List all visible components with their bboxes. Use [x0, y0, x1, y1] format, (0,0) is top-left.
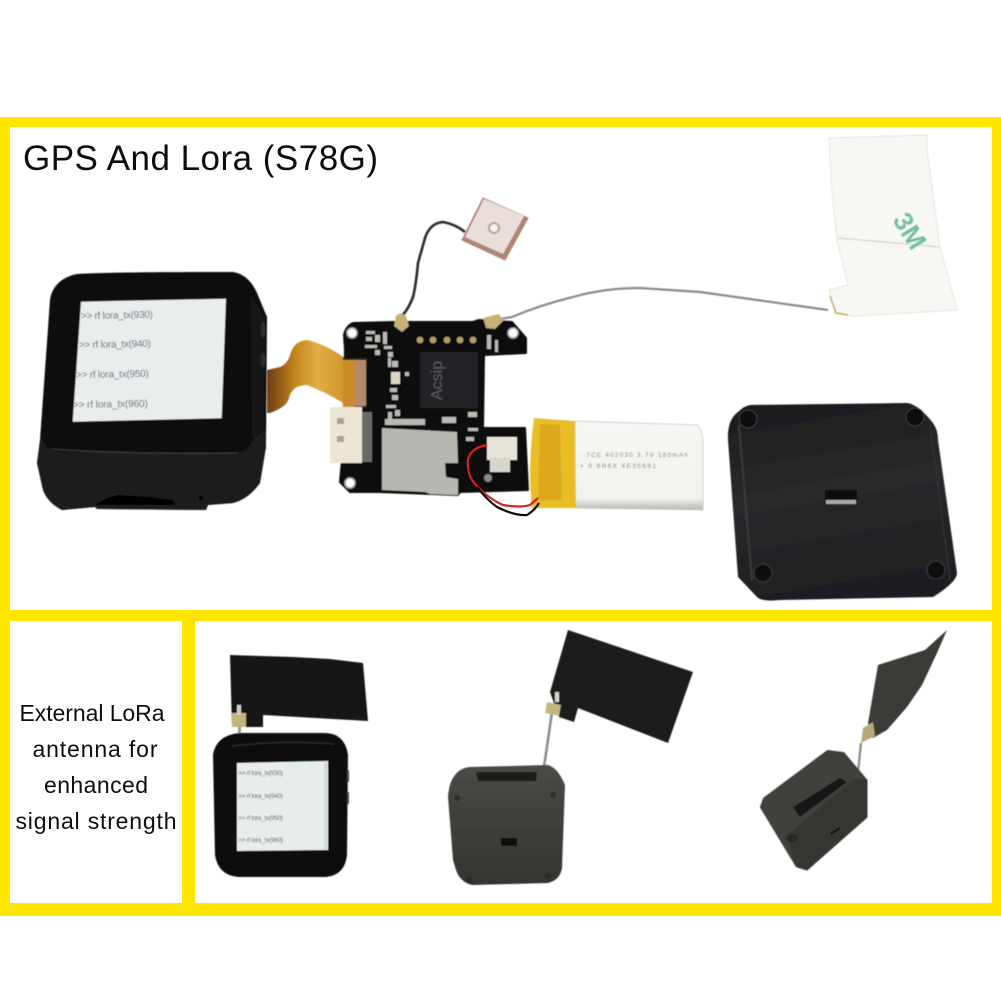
- main chip: [420, 352, 478, 408]
- gold header pins: [417, 337, 476, 343]
- flex antenna: [550, 630, 693, 743]
- PCB main board: [330, 314, 528, 495]
- LiPo battery: + 0 6R6X 4E35691: [580, 463, 656, 470]
- device front with external antenna: [213, 655, 368, 877]
- main chip: Acsip: [429, 361, 446, 400]
- board outline: [340, 320, 528, 495]
- device body: [37, 272, 267, 510]
- device screen: >> rf lora_tx(960): [238, 837, 283, 844]
- back cover plate: [728, 403, 957, 601]
- 3M logo: 3M: [887, 207, 932, 255]
- screw holes: [739, 408, 945, 582]
- back slot: [501, 838, 517, 846]
- device screen: [73, 299, 226, 422]
- flex ribbon cable: [267, 340, 368, 413]
- antenna wire: [544, 712, 552, 767]
- white JST header: [330, 407, 372, 463]
- yellow frame: [0, 117, 1001, 916]
- mounting holes: [347, 328, 357, 338]
- 3M adhesive flat antenna sticker: [829, 135, 957, 316]
- device screen: >> rf lora_tx(960): [73, 399, 148, 411]
- caption: external LoRa antenna: signal strength: [16, 808, 176, 834]
- antenna connector: [545, 692, 561, 716]
- device: watch front with screen: [37, 272, 267, 510]
- antenna connector: [232, 705, 246, 734]
- device screen: >> rf lora_tx(940): [79, 339, 151, 351]
- device screen: >> rf lora_tx(940): [238, 793, 283, 800]
- caption: external LoRa antenna: antenna for: [32, 736, 158, 762]
- black flex antenna: [230, 655, 368, 727]
- battery wires: [468, 445, 539, 515]
- device screen: [237, 761, 328, 851]
- antenna connector: [861, 722, 875, 743]
- silkscreen components: [365, 331, 498, 441]
- device angled view with antenna: [762, 630, 947, 870]
- antenna wire: [858, 743, 861, 772]
- device screen: >> rf lora_tx(930): [81, 310, 153, 322]
- microSD slot: [382, 428, 458, 495]
- caption: external LoRa antenna: External LoRa: [20, 700, 165, 726]
- LCD connector: [343, 358, 367, 408]
- device screen: >> rf lora_tx(950): [238, 815, 283, 822]
- battery connector: [487, 437, 517, 460]
- device body: [213, 733, 348, 877]
- GPS and LoRa u.fl connectors: [394, 314, 503, 332]
- device screen: >> rf lora_tx(930): [238, 770, 283, 777]
- flex antenna: [868, 630, 947, 738]
- LoRa antenna cable: [500, 288, 828, 319]
- center slot: [825, 490, 857, 505]
- device body: [448, 765, 565, 885]
- caption: external LoRa antenna: enhanced: [44, 772, 148, 798]
- device screen: >> rf lora_tx(950): [76, 369, 149, 381]
- device body: [762, 752, 865, 868]
- device lower side: [37, 430, 266, 510]
- LiPo battery: · 7CE 402030 3.7V 180mAh: [580, 452, 688, 459]
- device back with external antenna: [448, 630, 693, 885]
- GPS ceramic patch antenna: [402, 198, 528, 316]
- caption: external LoRa antenna: [16, 700, 176, 834]
- title: GPS And Lora (S78G): [23, 139, 378, 178]
- LiPo battery: [530, 418, 703, 510]
